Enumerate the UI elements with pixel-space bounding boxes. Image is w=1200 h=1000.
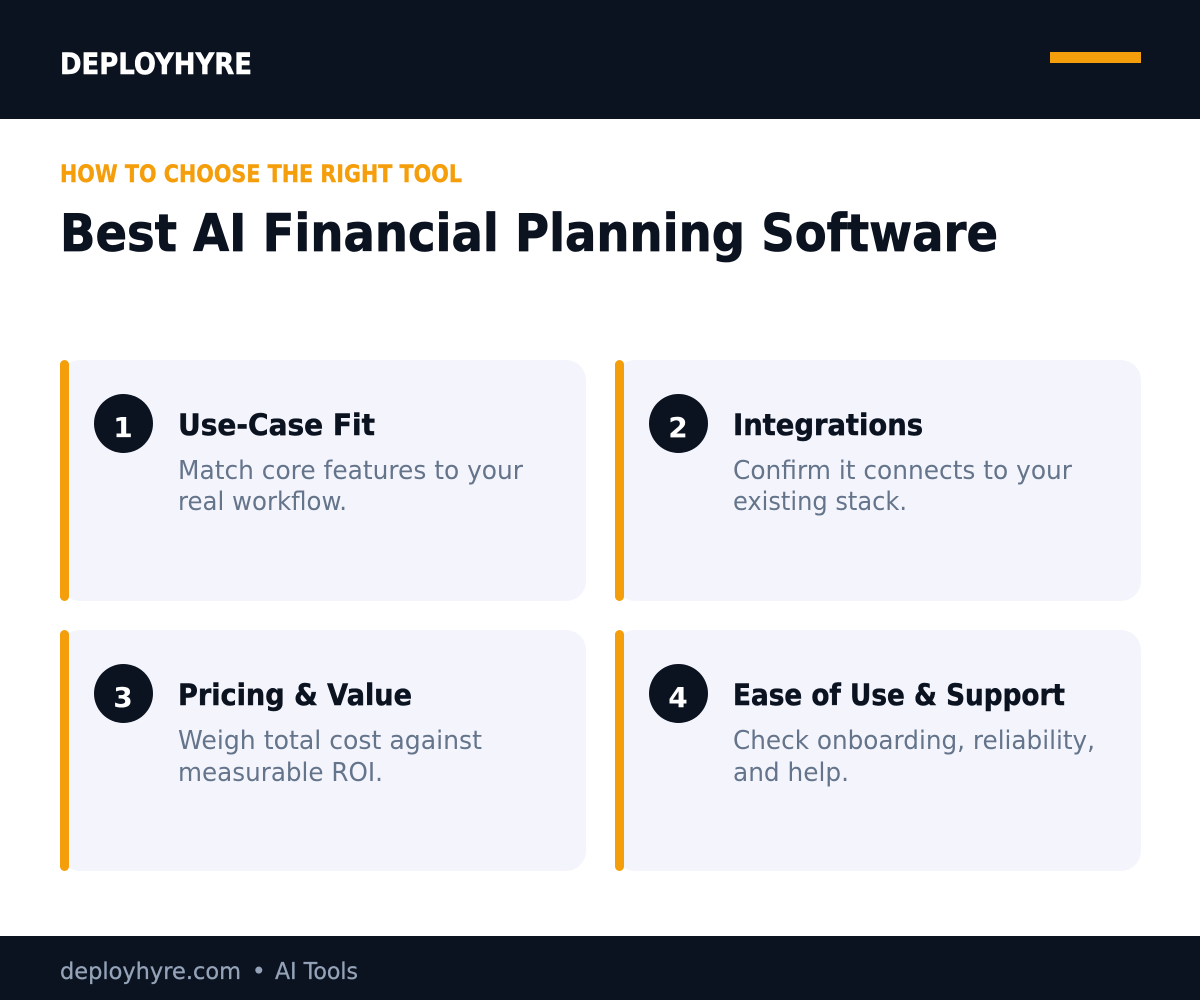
number badge 3: 3 bbox=[113, 681, 133, 714]
header band bbox=[0, 0, 1200, 119]
card description bbox=[733, 726, 1095, 788]
brand name: DEPLOYHYRE bbox=[60, 47, 252, 81]
card description bbox=[733, 456, 1072, 517]
main title: Best AI Financial Planning Software bbox=[60, 204, 998, 264]
number badge 4 bbox=[649, 664, 708, 723]
card heading: Use-Case Fit bbox=[178, 408, 375, 442]
card heading: Integrations bbox=[733, 408, 923, 442]
card description: measurable ROI. bbox=[178, 758, 383, 788]
card heading: Ease of Use & Support bbox=[733, 678, 1065, 712]
card description: Check onboarding, reliability, bbox=[733, 726, 1095, 756]
number badge 1 bbox=[94, 394, 153, 453]
card description bbox=[178, 726, 482, 788]
eyebrow heading: HOW TO CHOOSE THE RIGHT TOOL bbox=[60, 160, 462, 188]
header accent bar bbox=[1050, 52, 1141, 63]
panel: integrations bbox=[615, 360, 1141, 601]
number badge 2: 2 bbox=[668, 411, 688, 444]
panel: ease of use and support bbox=[615, 630, 1141, 871]
card accent bar bbox=[60, 360, 69, 601]
footer text: • bbox=[252, 959, 266, 985]
footer text bbox=[60, 959, 358, 985]
number badge 4: 4 bbox=[668, 681, 688, 714]
card description: and help. bbox=[733, 758, 849, 788]
number badge 3 bbox=[94, 664, 153, 723]
card description: Weigh total cost against bbox=[178, 726, 482, 756]
card description bbox=[178, 456, 523, 517]
card description: Match core features to your bbox=[178, 456, 523, 486]
footer band bbox=[0, 936, 1200, 1000]
card description: real workflow. bbox=[178, 487, 347, 517]
card description: Confirm it connects to your bbox=[733, 456, 1072, 486]
card accent bar bbox=[615, 360, 624, 601]
card description: existing stack. bbox=[733, 487, 907, 517]
number badge 1: 1 bbox=[113, 411, 133, 444]
card accent bar bbox=[60, 630, 69, 871]
card heading: Pricing & Value bbox=[178, 678, 412, 712]
footer text: AI Tools bbox=[275, 959, 358, 985]
footer text: deployhyre.com bbox=[60, 959, 241, 985]
panel: pricing and value bbox=[60, 630, 586, 871]
card accent bar bbox=[615, 630, 624, 871]
panel: use-case fit bbox=[60, 360, 586, 601]
number badge 2 bbox=[649, 394, 708, 453]
